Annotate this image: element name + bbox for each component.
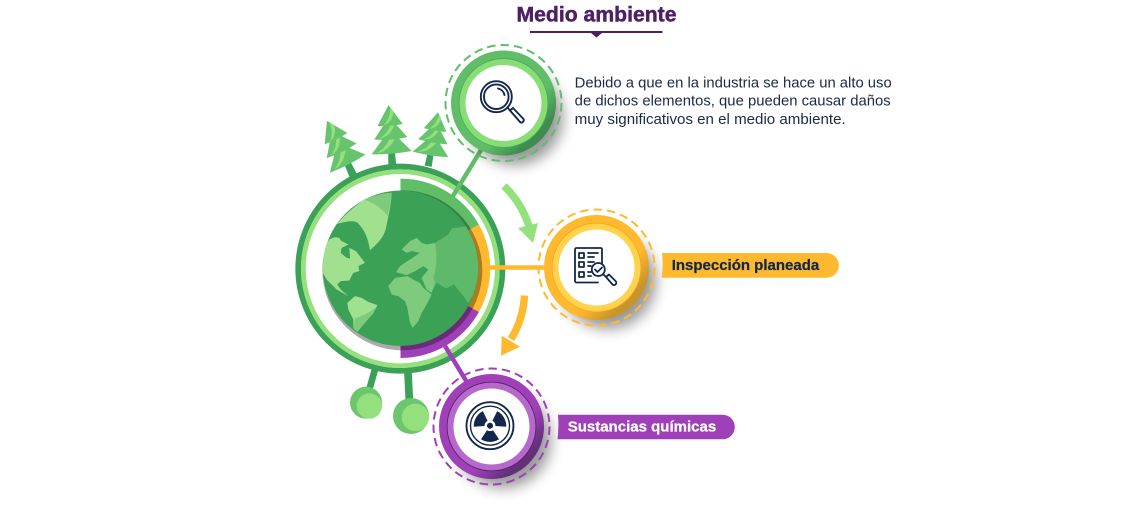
icon: checklist with magnifier: [575, 248, 616, 285]
north america: [320, 237, 365, 296]
south america: [347, 296, 377, 332]
arrow: yellow: [501, 296, 524, 356]
connector: yellow: [488, 265, 546, 270]
ball left: [350, 387, 382, 419]
description text: [575, 76, 892, 128]
globe: [320, 191, 480, 346]
tree left: [309, 112, 371, 184]
tree centre: [369, 104, 412, 167]
icon: radiation: [466, 402, 514, 449]
europe: [396, 238, 436, 293]
title: Medio ambiente: [516, 3, 677, 27]
ball right: [393, 398, 429, 434]
description text: muy significativos en el medio ambiente.: [575, 112, 846, 128]
asia: [422, 226, 480, 303]
label: Inspección planeada: [662, 253, 839, 278]
greenland: [337, 193, 392, 250]
arc segments: [400, 179, 490, 358]
label: Inspección planeada: Inspección planeada: [672, 257, 820, 274]
icon: magnifying glass: [481, 81, 524, 123]
ball stem left: [369, 369, 375, 389]
africa: [388, 276, 432, 328]
label: Sustancias químicas: [558, 415, 735, 439]
title: [516, 3, 677, 38]
globe shadow: [322, 190, 482, 350]
node: purple radiation: [434, 368, 551, 488]
node: green magnifier: [446, 45, 563, 165]
ball stem right: [408, 373, 409, 400]
connector: green: [453, 150, 481, 196]
description text: de dichos elementos, que pueden causar daños: [575, 94, 891, 110]
arrow: green: [504, 186, 538, 243]
connector: purple: [445, 346, 468, 384]
description text: Debido a que en la industria se hace un alto uso: [575, 76, 892, 92]
label: Sustancias químicas: Sustancias químicas: [568, 419, 716, 436]
globe illustration with ring, trees and balls: [298, 104, 502, 434]
tree right: [410, 109, 456, 170]
outer ring: [298, 166, 502, 371]
node: yellow checklist: [538, 210, 656, 329]
